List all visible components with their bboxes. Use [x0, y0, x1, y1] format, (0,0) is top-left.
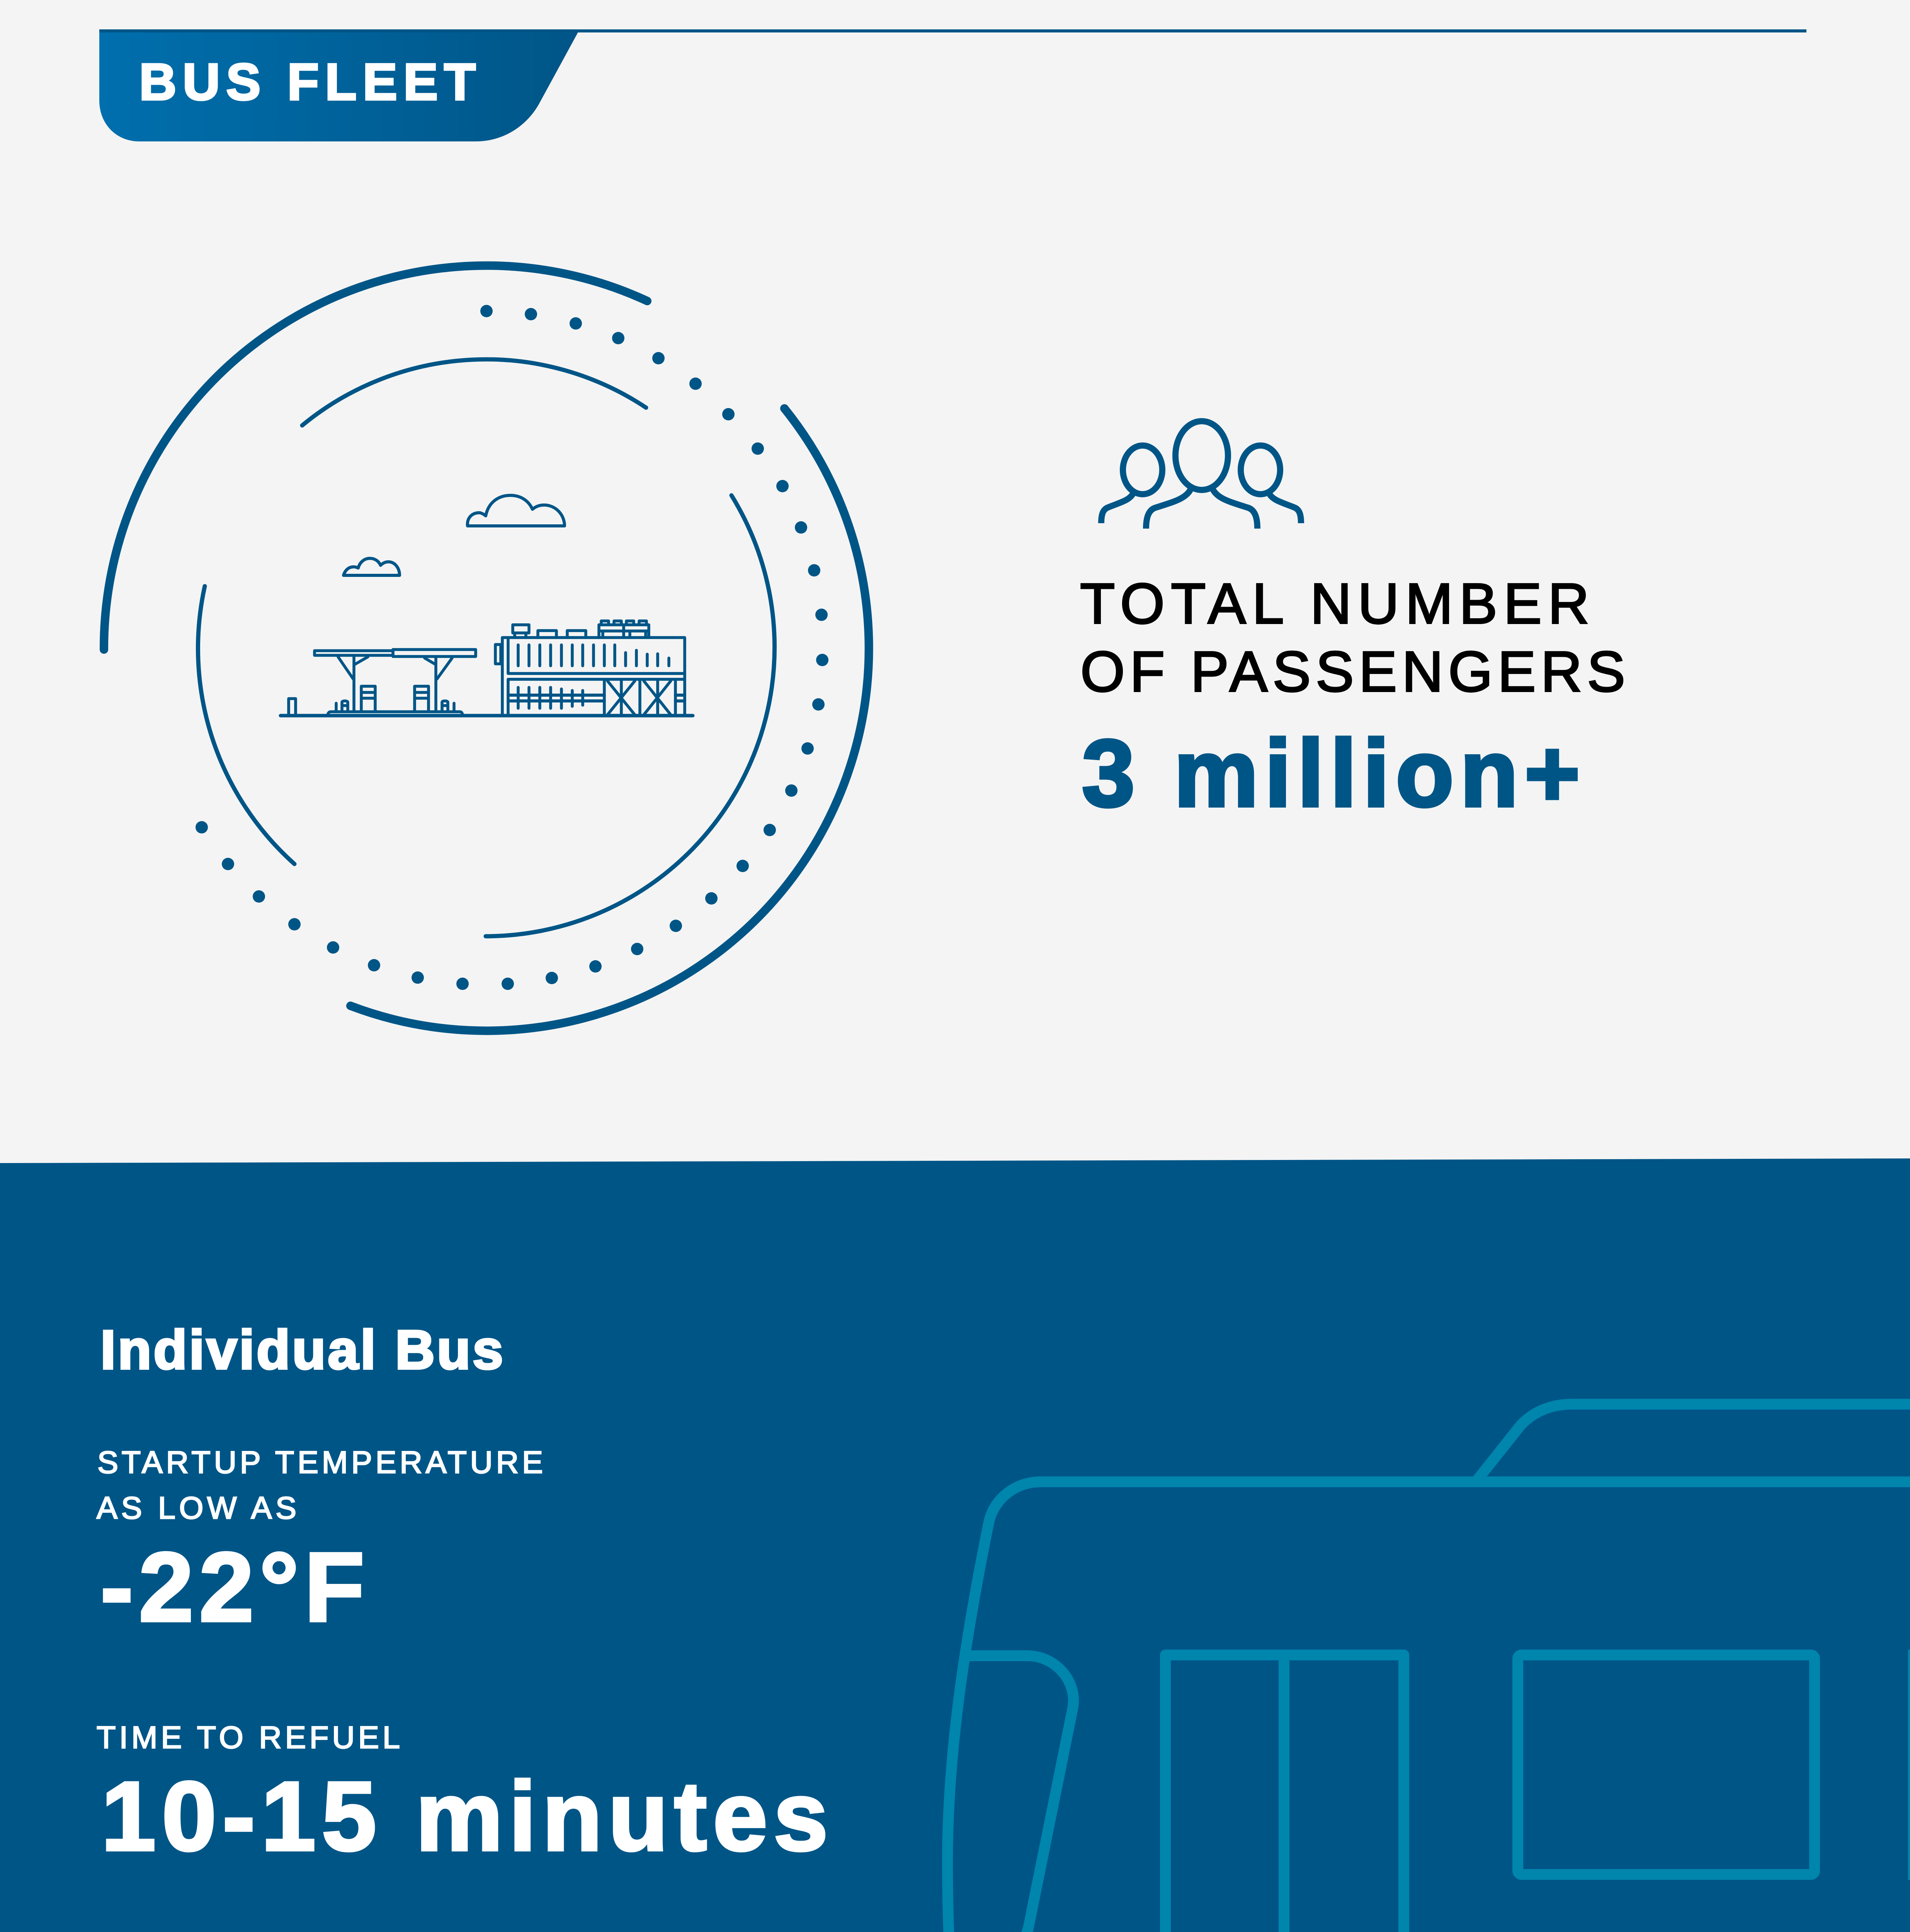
panel: individual bus dark background [0, 1158, 1910, 1932]
text: total number of passengers: TOTAL NUMBER [1080, 572, 1589, 636]
icon: bus outline [946, 1404, 1910, 1932]
startup temperature [97, 1445, 543, 1642]
icon: large cloud [468, 495, 565, 526]
illustration: hydrogen fuel station [281, 621, 693, 716]
text: total number of passengers: OF PASSENGERS [1080, 640, 1625, 704]
heading: bus fleet tab [99, 29, 1806, 141]
platform [328, 712, 463, 715]
icon: small cloud [344, 558, 400, 575]
outer ring arcs [104, 265, 869, 1031]
time to refuel: TIME TO REFUEL [97, 1720, 400, 1755]
startup temperature: -22°F [100, 1532, 364, 1642]
dotted ring [196, 305, 828, 990]
inner ring arcs [198, 359, 775, 936]
center person [1175, 421, 1228, 490]
startup temperature: STARTUP TEMPERATURE [97, 1445, 543, 1480]
stat: 3 million+: 3 million+ [1082, 720, 1580, 827]
lower band [508, 695, 685, 701]
post [289, 699, 296, 716]
lower vents [518, 687, 583, 708]
text block: individual bus [97, 1319, 828, 1932]
canopy supports [338, 657, 452, 711]
canopy [315, 651, 393, 655]
panel: bus fleet background [0, 0, 1910, 1164]
icon: passengers [1101, 421, 1301, 529]
building frame [495, 638, 685, 716]
heading: Individual Bus [100, 1319, 503, 1381]
text: total number of passengers [1080, 572, 1625, 704]
heading: bus fleet tab: BUS FLEET [139, 53, 476, 111]
left person [1123, 446, 1162, 494]
startup temperature: AS LOW AS [97, 1491, 296, 1526]
right person [1241, 446, 1280, 494]
door [1165, 1655, 1404, 1932]
cross bracing [604, 679, 675, 716]
roof equipment [513, 625, 649, 638]
windows [1518, 1655, 1815, 1874]
time to refuel: 10-15 minutes [101, 1761, 828, 1871]
windshield [951, 1656, 1073, 1932]
ground line [281, 714, 693, 717]
bus body [946, 1482, 1910, 1932]
pumps [361, 686, 429, 710]
icon: concentric rings [104, 265, 869, 1031]
upper vents [518, 645, 669, 666]
bollards [336, 701, 454, 710]
roof unit [1476, 1404, 1910, 1482]
roof tanks [601, 621, 646, 624]
